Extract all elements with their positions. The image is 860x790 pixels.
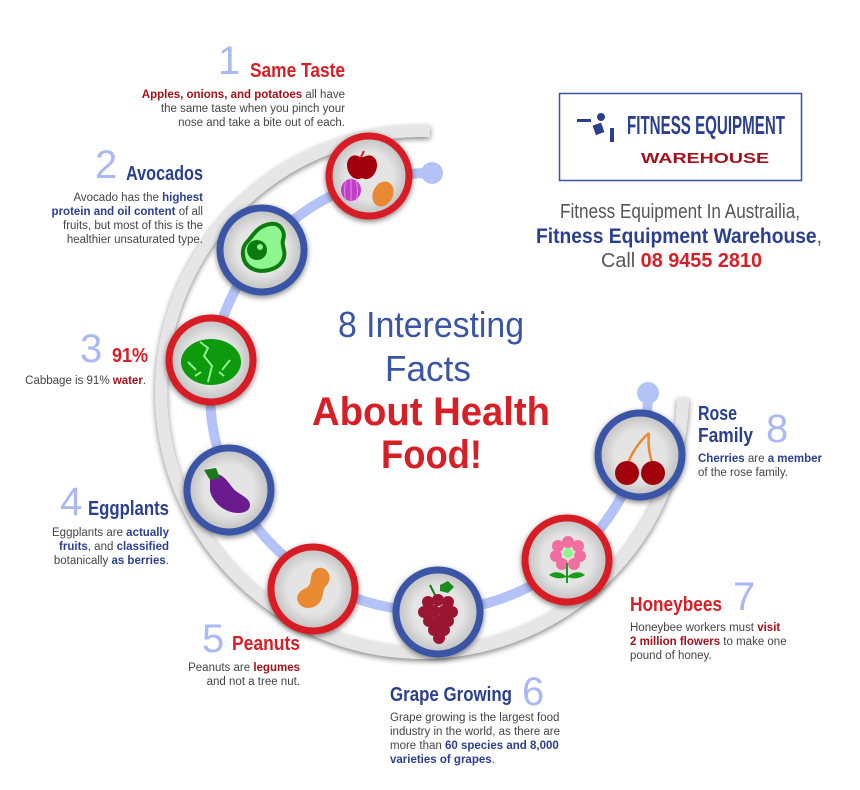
fact 3 <box>25 327 148 387</box>
grey arc <box>161 131 683 653</box>
fact 1: nose and take a bite out of each. <box>178 117 345 129</box>
main title: Food! <box>381 433 482 477</box>
icon circle 3: cabbage <box>169 318 253 402</box>
icon circle 7: flower <box>525 518 609 602</box>
fact 8: of the rose family. <box>698 467 788 479</box>
fact 8: Cherries are a member <box>698 453 823 465</box>
fact 4 <box>52 480 170 567</box>
fact 5: and not a tree nut. <box>207 676 300 688</box>
fact 8: 8 <box>766 407 788 451</box>
fact 7: pound of honey. <box>630 650 712 662</box>
main title: About Health <box>312 390 550 434</box>
fact 2: fruits, but most of this is the <box>63 220 203 232</box>
fact 7: Honeybees <box>630 594 722 616</box>
fact 7: Honeybee workers must visit <box>630 622 780 634</box>
fact 7: 7 <box>733 575 755 619</box>
contact text: Call 08 9455 2810 <box>601 250 762 272</box>
icon circle 5: peanut <box>271 547 355 631</box>
fact 4: 4 <box>60 480 82 524</box>
fact 5 <box>188 617 300 688</box>
fact 6: Grape growing is the largest food <box>390 712 559 724</box>
icon circle 6: grapes <box>396 570 480 654</box>
fact 5: Peanuts are legumes <box>188 662 300 674</box>
fact 1: 1 <box>218 39 240 83</box>
fact 4: Eggplants <box>88 498 169 520</box>
fact 2: healthier unsaturated type. <box>67 234 203 246</box>
fact 3: Cabbage is 91% water. <box>25 375 146 387</box>
blue connector line <box>210 162 659 611</box>
main title <box>312 304 550 477</box>
fact 8: Family <box>698 425 754 447</box>
fact 6: more than 60 species and 8,000 <box>390 740 559 752</box>
fact 6: 6 <box>522 670 544 714</box>
fact 3: 3 <box>80 327 102 371</box>
fact 4: fruits, and classified <box>59 541 169 553</box>
fact 2: 2 <box>95 143 117 187</box>
fact 7: 2 million flowers to make one <box>630 636 787 648</box>
fact 1: Apples, onions, and potatoes all have <box>142 89 345 101</box>
fact 1 <box>142 39 345 129</box>
fact 6: Grape Growing <box>390 684 512 706</box>
fact 3: 91% <box>112 345 148 367</box>
logo box <box>560 94 802 180</box>
fact 8 <box>698 403 823 479</box>
fact 6: varieties of grapes. <box>390 754 495 766</box>
icon circle 8: cherries <box>598 413 682 497</box>
fact 1: Same Taste <box>250 60 345 82</box>
fact 5: Peanuts <box>232 633 300 655</box>
contact text <box>536 201 822 272</box>
fact 2 <box>52 143 203 246</box>
fact 2: protein and oil content of all <box>52 206 203 218</box>
contact text: Fitness Equipment Warehouse, <box>536 225 822 248</box>
fact 5: 5 <box>202 617 224 661</box>
main title: 8 Interesting <box>338 304 524 345</box>
logo box: WAREHOUSE <box>641 150 769 167</box>
icon circle 1: apple onion potato <box>329 136 409 216</box>
fact 6: industry in the world, as there are <box>390 726 560 738</box>
fact 8: Rose <box>698 403 737 425</box>
fact 2: Avocados <box>126 163 203 185</box>
fact 7 <box>630 575 787 662</box>
fact 1: the same taste when you pinch your <box>161 103 345 115</box>
contact text: Fitness Equipment In Austrailia, <box>560 201 800 223</box>
fact 4: Eggplants are actually <box>52 527 170 539</box>
icon circle 4: eggplant <box>187 448 271 532</box>
fact 6 <box>390 670 560 766</box>
icon: lifter <box>577 113 614 142</box>
fact 4: botanically as berries. <box>54 555 169 567</box>
icon circle 2: avocado <box>220 208 304 292</box>
main title: Facts <box>385 348 471 389</box>
fact 2: Avocado has the highest <box>73 192 203 204</box>
